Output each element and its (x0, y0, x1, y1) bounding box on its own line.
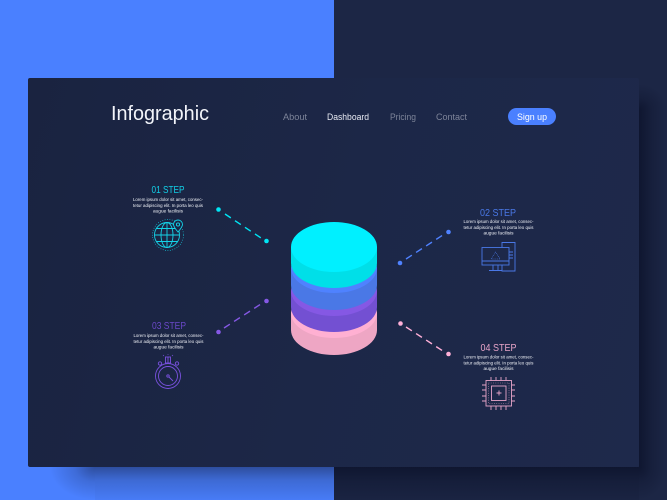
step 02 text: Lorem ipsum dolor sit amet, consec- (464, 219, 534, 225)
sign up button (508, 108, 556, 125)
step 01 text: augue facilisis (153, 208, 184, 214)
layer: purple (291, 266, 377, 332)
title: Infographic (111, 102, 209, 125)
step 02 text: augue facilisis (484, 230, 514, 236)
icon: microchip (482, 377, 515, 410)
step 02 text (464, 207, 534, 236)
navigation menu: Contact (436, 112, 467, 122)
connector 03 (216, 299, 269, 334)
step 03 text (134, 320, 204, 350)
step 03 text: 03 STEP (152, 320, 186, 332)
step 04 text (464, 342, 534, 372)
step 01 text: tetur adipiscing elit. In porta leo quis (133, 203, 204, 209)
step 03 text: tetur adipiscing elit. In porta leo quis (134, 339, 204, 345)
background: navy half (334, 0, 667, 500)
step 02 text: tetur adipiscing elit. In porta leo quis (464, 225, 534, 231)
layer: blue (291, 243, 377, 310)
step 04 text: tetur adipiscing elit. In porta leo quis (464, 360, 534, 366)
navigation menu: Dashboard (327, 112, 369, 122)
step 03 text: Lorem ipsum dolor sit amet, consec- (134, 333, 204, 339)
step 01 text: 01 STEP (152, 184, 184, 196)
step 04 text: 04 STEP (480, 342, 516, 354)
step 01 text (133, 184, 204, 214)
icon: stopwatch (156, 354, 180, 388)
step 04 text: Lorem ipsum dolor sit amet, consec- (464, 354, 534, 360)
step 04 text: augue facilisis (484, 366, 514, 372)
panel: main card (28, 78, 639, 467)
connector 04 (398, 321, 451, 356)
layer: pink (291, 288, 377, 355)
icon: computer (482, 242, 515, 271)
step 01 text: Lorem ipsum dolor sit amet, consec- (133, 197, 203, 203)
navigation menu: About (283, 112, 307, 122)
icon: globe with pin (152, 220, 184, 250)
connector 02 (398, 230, 451, 265)
step 03 text: augue facilisis (154, 344, 184, 350)
stacked cylinder chart (291, 222, 377, 355)
step 02 text: 02 STEP (480, 207, 516, 219)
navigation menu (283, 112, 467, 122)
background: blue half (0, 0, 334, 500)
sign up button: Sign up (517, 112, 547, 122)
layer: cyan (291, 222, 377, 288)
navigation menu: Pricing (390, 112, 416, 122)
connector 01 (216, 207, 269, 243)
